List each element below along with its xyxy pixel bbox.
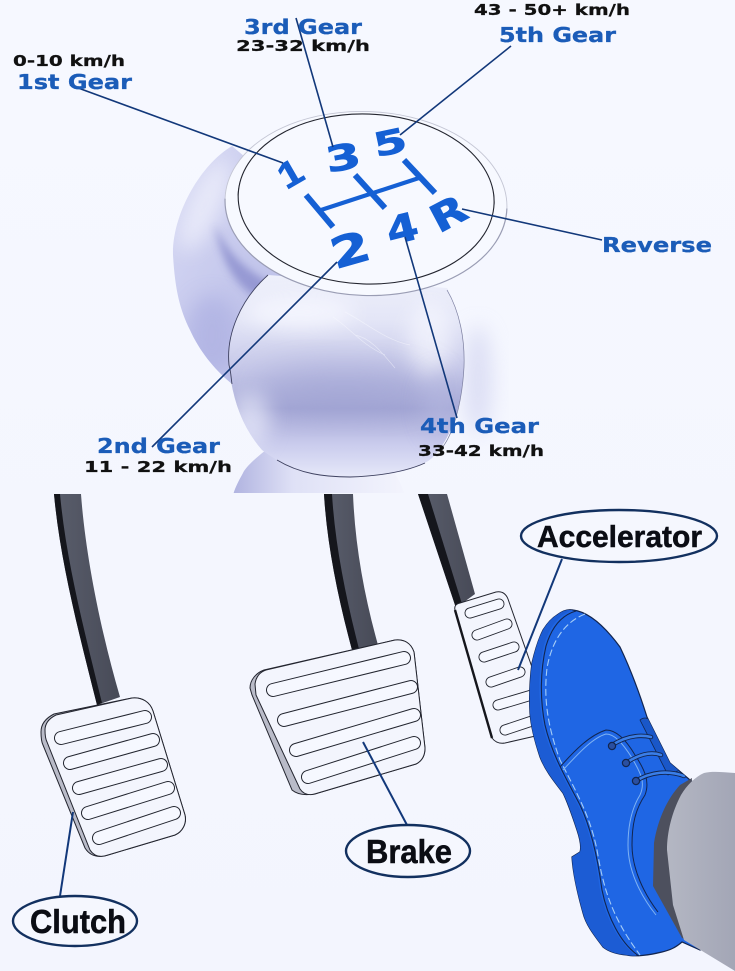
knob neck (234, 452, 372, 493)
leader: reverse (462, 209, 602, 240)
gear knob illustration (169, 107, 510, 495)
accelerator pedal (418, 494, 540, 743)
label: 1st gear (13, 52, 132, 94)
trouser cuff (653, 778, 700, 945)
leader: 3rd gear (296, 18, 333, 147)
leader: clutch (60, 812, 73, 896)
leader: 4th gear (405, 237, 457, 418)
callout: brake (346, 825, 470, 877)
clutch pad ribs (61, 717, 174, 838)
gear number 4: 4 (381, 203, 423, 254)
label: 4th gear (418, 414, 544, 460)
trouser leg (653, 772, 735, 971)
knob soft drop shadow (464, 325, 492, 435)
label: 5th gear: 43 - 50+ km/h (474, 1, 630, 19)
accelerator arm (418, 494, 475, 608)
gear number 3: 3 (322, 136, 364, 181)
brake pad (250, 640, 425, 795)
brake arm (324, 494, 378, 650)
callout: clutch (13, 896, 137, 946)
label: 4th gear: 33-42 km/h (418, 442, 544, 460)
sole edge (530, 610, 637, 956)
brake pedal (250, 494, 425, 795)
label: 2nd gear: 2nd Gear (97, 434, 220, 458)
clutch pedal (41, 494, 185, 856)
leader: brake (363, 742, 407, 825)
label: 3rd gear: 3rd Gear (244, 15, 362, 39)
brake pad ribs (273, 658, 414, 777)
label: 4th gear: 4th Gear (420, 414, 539, 438)
label: 1st gear: 1st Gear (17, 70, 132, 94)
eyelets (608, 742, 640, 785)
laces (612, 736, 684, 781)
gear number 1: 1 (271, 151, 311, 197)
callout: brake: Brake (366, 833, 452, 870)
clutch arm (54, 494, 120, 705)
blue shoe (529, 609, 701, 956)
knob top disc (222, 107, 510, 300)
gear number 2: 2 (325, 221, 376, 279)
gear letter R: R (422, 186, 475, 242)
knob lower bulge (229, 275, 464, 477)
shift pattern (306, 160, 435, 227)
stitching (546, 614, 640, 955)
label: 5th gear: 5th Gear (499, 23, 616, 47)
shoe body (530, 610, 720, 956)
callout: accelerator: Accelerator (537, 519, 702, 554)
label: 2nd gear: 11 - 22 km/h (84, 458, 232, 476)
label: reverse: Reverse (602, 233, 712, 257)
leader: 2nd gear (152, 262, 337, 447)
callout: accelerator (521, 510, 717, 562)
accelerator pad (455, 592, 540, 743)
upper seam (560, 730, 658, 912)
leader: 5th gear (400, 46, 511, 135)
gear number 5: 5 (370, 120, 410, 165)
tongue (640, 718, 680, 775)
callout: clutch: Clutch (30, 903, 126, 940)
leader: 1st gear (70, 85, 283, 163)
label: 2nd gear (84, 434, 232, 476)
label: 3rd gear (236, 15, 370, 55)
accelerator pad ribs (470, 604, 535, 730)
label: 5th gear (474, 1, 630, 47)
knob upper bulb (173, 146, 281, 384)
clutch pad (41, 698, 185, 856)
label: 1st gear: 0-10 km/h (13, 52, 125, 70)
label: 3rd gear: 23-32 km/h (236, 37, 370, 55)
trouser fabric (667, 772, 735, 971)
leader: accelerator (518, 559, 562, 670)
